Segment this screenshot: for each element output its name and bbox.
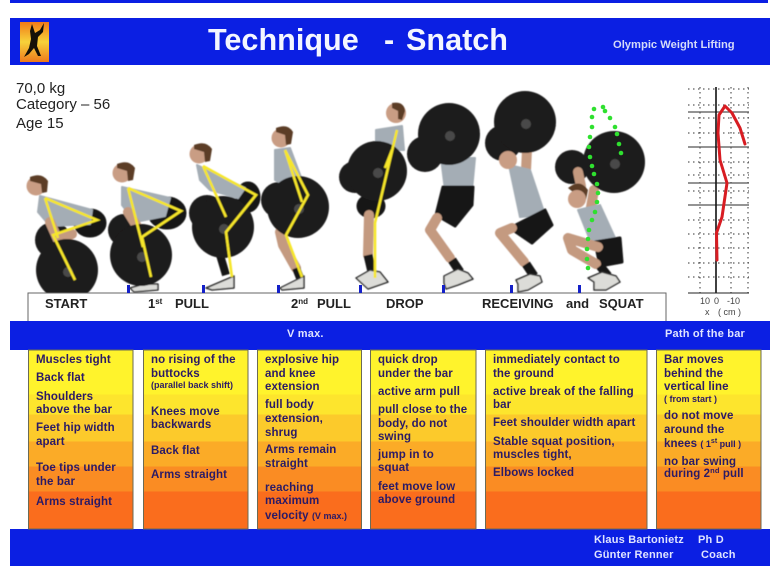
chart axis labels: ( cm ) bbox=[718, 307, 741, 317]
panel: start: above the bar bbox=[36, 404, 112, 416]
panel: start: Muscles tight bbox=[36, 354, 111, 366]
athlete data: Age 15 bbox=[16, 115, 64, 132]
panel: second pull: full body bbox=[265, 399, 314, 411]
footer band bbox=[10, 529, 770, 566]
figure 3: second pull tilt bbox=[189, 143, 259, 290]
panel: receiving and squat: Stable squat position, bbox=[493, 436, 615, 448]
panel: receiving and squat: Feet shoulder width apart bbox=[493, 417, 636, 429]
panel: path of the bar: ( from start ) bbox=[664, 394, 717, 404]
panel: path of the bar: behind the bbox=[664, 368, 723, 380]
panel: path of the bar bbox=[656, 350, 761, 529]
panel: drop: swing bbox=[378, 431, 411, 443]
panel: start: Shoulders bbox=[36, 391, 93, 403]
phase labels: 1 bbox=[148, 296, 155, 311]
figure 5: drop start bbox=[339, 103, 407, 289]
panel: start: the bar bbox=[36, 476, 75, 488]
panel: second pull: and knee bbox=[265, 368, 316, 380]
athlete data: Category – 56 bbox=[16, 96, 110, 113]
phase labels: 2 bbox=[291, 296, 298, 311]
subtitle: Olympic Weight Lifting bbox=[613, 39, 735, 51]
velocity label: V max. bbox=[287, 328, 324, 340]
panel: second pull bbox=[258, 350, 362, 529]
panel: first pull: Back flat bbox=[151, 445, 200, 457]
chart axis labels: 10 bbox=[700, 296, 710, 306]
title word: Snatch bbox=[406, 23, 508, 57]
panel: first pull: no rising of the bbox=[151, 354, 236, 366]
panel: second pull: straight bbox=[265, 458, 308, 470]
phase labels bbox=[45, 296, 644, 311]
figure 1: start bbox=[26, 175, 105, 301]
panel: drop: jump in to bbox=[377, 449, 434, 461]
phase labels: nd bbox=[298, 297, 308, 306]
figure 2: first pull bbox=[108, 162, 185, 292]
credits: Klaus Bartonietz bbox=[594, 534, 684, 546]
path label: Path of the bar bbox=[665, 328, 746, 340]
panel: drop: body, do not bbox=[378, 418, 447, 430]
panel: receiving and squat: immediately contact to bbox=[493, 354, 620, 366]
phase labels: RECEIVING bbox=[482, 296, 554, 311]
phase label box bbox=[28, 285, 666, 321]
figure 6: drop under the bar bbox=[407, 103, 480, 289]
panel: drop: squat bbox=[378, 462, 409, 474]
panel: second pull: velocity (V max.) bbox=[265, 510, 347, 522]
chart axis labels bbox=[700, 296, 741, 317]
credits: Günter Renner bbox=[594, 549, 674, 561]
panel: drop: active arm pull bbox=[378, 386, 460, 398]
panel: drop bbox=[370, 350, 476, 529]
panel: path of the bar: around the bbox=[664, 424, 724, 436]
panel: drop: pull close to the bbox=[378, 404, 467, 416]
panel: first pull: Knees move bbox=[151, 406, 220, 418]
chart axis labels: -10 bbox=[727, 296, 740, 306]
phase labels: PULL bbox=[317, 296, 351, 311]
panel: receiving and squat: muscles tight, bbox=[493, 449, 572, 461]
panel: second pull: Arms remain bbox=[265, 444, 336, 456]
panel: path of the bar: knees ( 1 bbox=[664, 438, 711, 450]
panel: path of the bar: nd bbox=[710, 466, 720, 475]
panel: second pull: extension bbox=[265, 381, 320, 393]
title dash: - bbox=[384, 23, 394, 57]
panel: drop: quick drop bbox=[378, 354, 438, 366]
blue band bbox=[10, 321, 770, 350]
panel: second pull: reaching bbox=[265, 482, 314, 494]
phase labels: START bbox=[45, 296, 87, 311]
credits: Ph D bbox=[698, 534, 724, 546]
panel: second pull: shrug bbox=[265, 427, 297, 439]
figure 4: second pull upright bbox=[261, 126, 329, 290]
panel: first pull bbox=[144, 350, 248, 529]
panel: receiving and squat bbox=[486, 350, 647, 529]
panel: path of the bar: st bbox=[711, 438, 718, 445]
panel: path of the bar: do not move bbox=[664, 410, 733, 422]
panel: start: apart bbox=[36, 436, 65, 448]
bar path chart bbox=[688, 87, 749, 317]
red bar trajectory bbox=[716, 106, 745, 260]
panel: path of the bar: during 2 bbox=[664, 468, 710, 480]
panel: receiving and squat: the ground bbox=[493, 368, 554, 380]
panel: path of the bar: vertical line bbox=[664, 381, 729, 393]
panel: path of the bar: pull ) bbox=[717, 439, 741, 449]
panel: start bbox=[28, 350, 133, 529]
panel: path of the bar: no bar swing bbox=[664, 456, 736, 468]
phase labels: DROP bbox=[386, 296, 424, 311]
panel: start: Back flat bbox=[36, 372, 85, 384]
panel: second pull: maximum bbox=[265, 495, 319, 507]
panel: first pull: backwards bbox=[151, 419, 211, 431]
panel: first pull: buttocks bbox=[151, 368, 200, 380]
panel: first pull: Arms straight bbox=[151, 469, 227, 481]
phase labels: and bbox=[566, 296, 589, 311]
phase tick marks bbox=[127, 285, 581, 293]
panel: drop: under the bar bbox=[378, 368, 453, 380]
icon: weightlifter logo bbox=[20, 22, 49, 62]
panel: drop: above ground bbox=[378, 494, 455, 506]
panel: start: Feet hip width bbox=[36, 422, 115, 434]
panel: path of the bar: pull bbox=[720, 468, 744, 480]
panel: first pull: (parallel back shift) bbox=[151, 380, 233, 390]
panel: start: Toe tips under bbox=[36, 462, 116, 474]
phase labels: PULL bbox=[175, 296, 209, 311]
phase labels: st bbox=[155, 297, 163, 306]
panel: second pull: extension, bbox=[265, 413, 323, 425]
credits bbox=[594, 534, 736, 561]
panel: second pull: explosive hip bbox=[265, 354, 339, 366]
top edge bar bbox=[10, 0, 768, 3]
panel: receiving and squat: Elbows locked bbox=[493, 467, 574, 479]
panel: path of the bar: Bar moves bbox=[664, 354, 724, 366]
panel: start: Arms straight bbox=[36, 496, 112, 508]
chart axis labels: 0 bbox=[714, 296, 719, 306]
athlete data bbox=[16, 80, 110, 132]
figure 7: receiving bbox=[485, 91, 556, 292]
credits: Coach bbox=[701, 549, 736, 561]
panel: receiving and squat: active break of the falling bbox=[493, 386, 634, 398]
title: Technique bbox=[208, 23, 359, 57]
chart axis labels: x bbox=[705, 307, 710, 317]
athlete data: 70,0 kg bbox=[16, 80, 65, 97]
bar path dots overlay bbox=[585, 105, 623, 270]
panel: drop: feet move low bbox=[378, 481, 455, 493]
phase labels: SQUAT bbox=[599, 296, 644, 311]
header banner bbox=[10, 18, 770, 65]
panel: receiving and squat: bar bbox=[493, 399, 512, 411]
figure 8: squat bbox=[555, 131, 645, 290]
